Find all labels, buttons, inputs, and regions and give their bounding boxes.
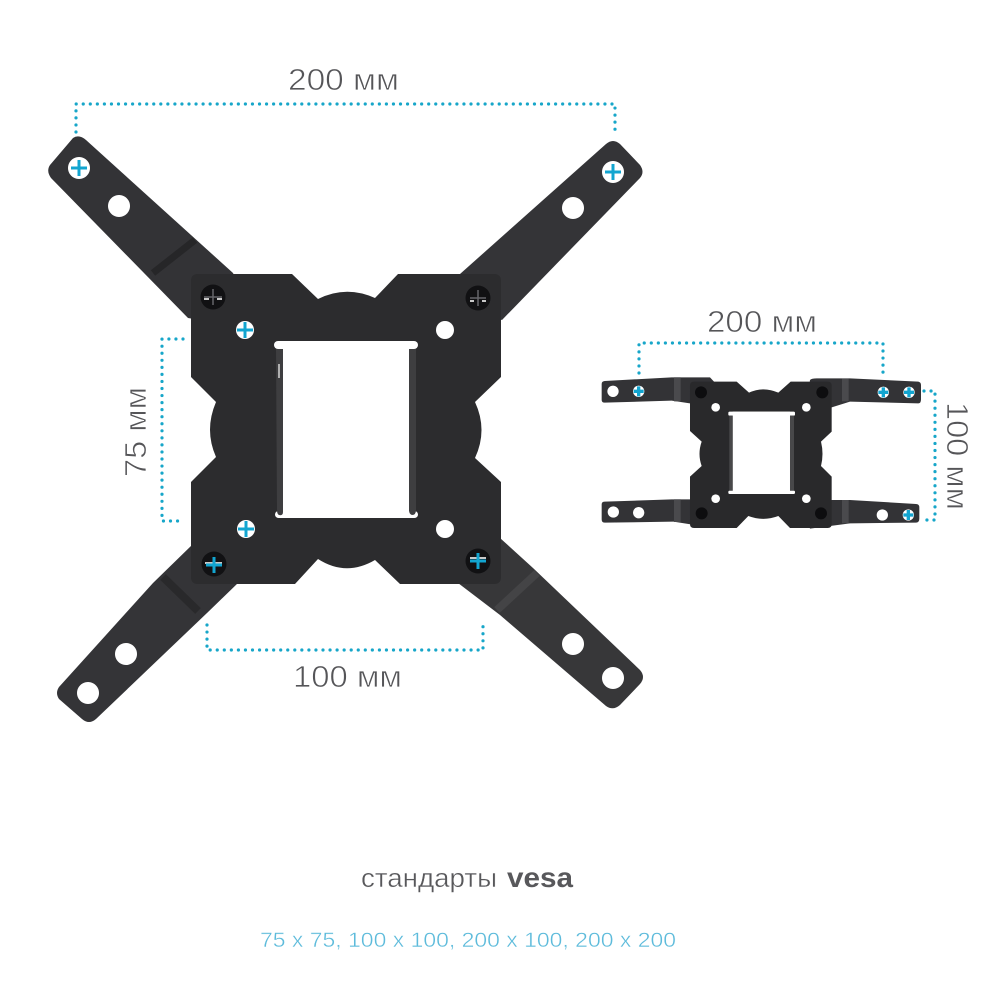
- arm: bottom left: [57, 545, 260, 722]
- dimension: small 200 mm: [639, 304, 883, 373]
- window opening: [274, 341, 418, 518]
- plate hole markers: [237, 322, 254, 537]
- heading: VESA standards: стандарты: [361, 863, 497, 893]
- mounting plate: [191, 274, 501, 584]
- dimension: large 200 mm: [76, 62, 615, 132]
- heading: VESA standards: vesa: [507, 862, 573, 893]
- plate holes: [236, 321, 454, 538]
- dimension: large 100 mm: [207, 625, 483, 694]
- dimension: small 100 mm: 100 мм: [940, 402, 975, 510]
- small arm: top left: [602, 377, 714, 403]
- dimension: large 200 mm: 200 мм: [288, 62, 399, 97]
- small bracket: [602, 377, 921, 529]
- dimension: large 75 mm: 75 мм: [118, 387, 153, 477]
- small arm: top right: [807, 378, 921, 407]
- small plate holes: [711, 403, 811, 503]
- dimension: small 100 mm: [924, 391, 975, 520]
- small plate: [690, 382, 832, 528]
- arm: top left: [48, 136, 260, 330]
- dimension: large 100 mm: 100 мм: [293, 659, 402, 694]
- arm: bottom right: [440, 538, 643, 708]
- heading: VESA standards: [361, 862, 573, 893]
- arm: top right: [440, 141, 642, 320]
- small screws: [695, 386, 828, 519]
- small window: [728, 412, 795, 494]
- small arm: bottom left: [602, 499, 713, 527]
- large bracket: [48, 136, 643, 722]
- screws: [200, 284, 490, 576]
- dimension: large 75 mm: [118, 339, 183, 521]
- list of VESA sizes: 75 x 75, 100 x 100, 200 x 100, 200 x 200: [260, 929, 676, 952]
- dimension: small 200 mm: 200 мм: [707, 304, 817, 339]
- small arm: bottom right: [807, 500, 919, 529]
